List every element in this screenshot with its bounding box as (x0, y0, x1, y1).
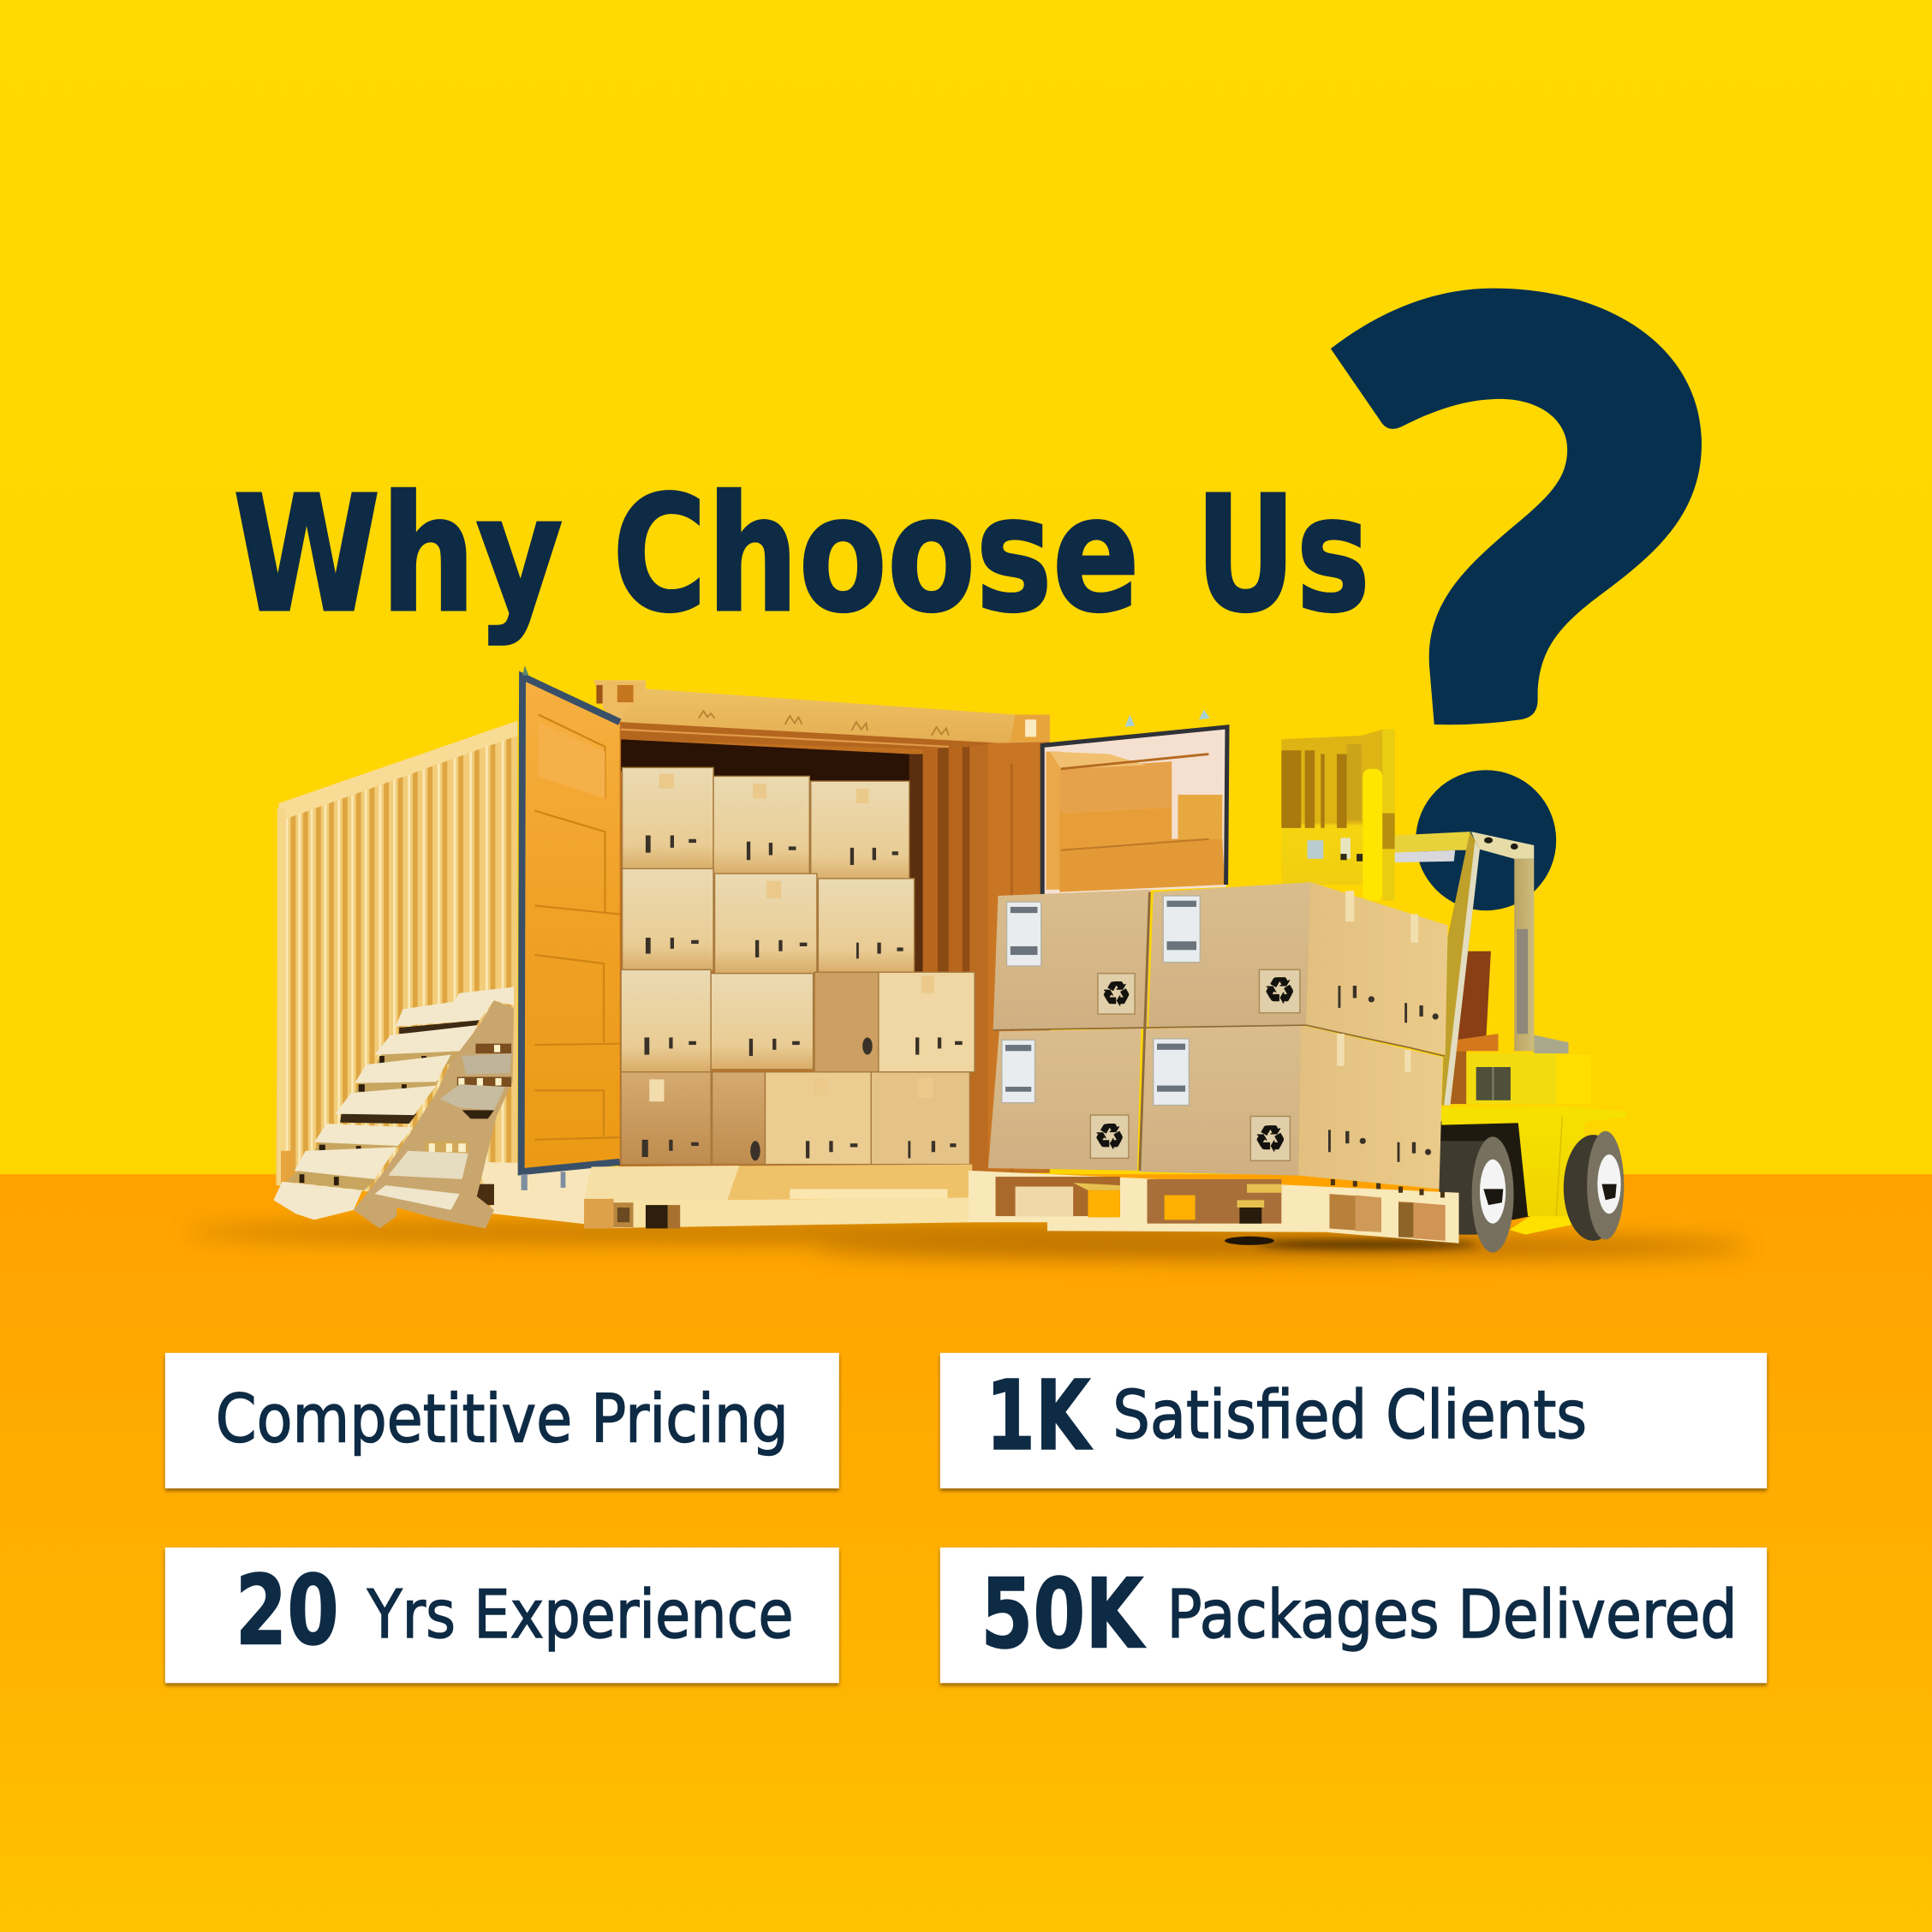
second pallet openings (425, 1044, 511, 1154)
row 4 cartons (621, 1072, 969, 1165)
row 1 cartons (623, 767, 909, 881)
carton tape (649, 774, 934, 1101)
background: yellow wall (0, 0, 1932, 1174)
title: Us (1196, 462, 1370, 648)
card: 50K Packages Delivered: Packages Delivered (1167, 1577, 1738, 1654)
icon: large question mark (1331, 289, 1702, 910)
icon: recycling badges: ♻ (1101, 975, 1131, 1014)
second pallet slats (374, 1053, 511, 1210)
ground shadow (185, 1221, 1750, 1258)
carton seams (993, 892, 1444, 1171)
left door (522, 665, 620, 1190)
collapsed pallet leaning on container (273, 987, 514, 1228)
pallet under cartons (969, 1171, 1459, 1245)
card: 1K Satisfied Clients: Satisfied Clients (1112, 1377, 1587, 1454)
card: 20 Yrs Experience: Yrs Experience (367, 1577, 794, 1654)
interior right wall ribs (909, 739, 1042, 1171)
row 2 cartons (623, 868, 915, 974)
forklift overhead guard (1395, 832, 1534, 1106)
shipping labels (1002, 896, 1200, 1106)
door frame (522, 677, 620, 1172)
cartons stacked in container (621, 767, 975, 1165)
interior ceiling shadow (621, 739, 909, 789)
cartons on pallet carried by forklift (969, 882, 1459, 1245)
card: 50K Packages Delivered (940, 1547, 1767, 1683)
card: 20 Yrs Experience (165, 1547, 839, 1683)
wooden pallet under container cargo (584, 1165, 972, 1228)
container interior (618, 721, 1050, 1173)
background: orange floor (0, 1174, 1932, 1932)
card: Competitive Pricing: Competitive Pricing (216, 1380, 789, 1458)
dark slat ticks (300, 1056, 426, 1185)
container top header beam (593, 680, 1050, 743)
side tape strips (1337, 891, 1418, 1072)
icon: recycling badges (1090, 969, 1300, 1160)
bottom cartons (988, 1025, 1443, 1189)
carton handling marks (642, 835, 963, 1160)
pallet gaps backing (286, 1020, 480, 1190)
top cartons (993, 882, 1448, 1055)
side handling marks (1328, 986, 1439, 1162)
card: Competitive Pricing (165, 1353, 839, 1488)
title: Why (233, 462, 564, 648)
icon: recycling badges: ♻ (1255, 1118, 1286, 1160)
title: Choose (612, 462, 1140, 648)
right door (1042, 710, 1227, 895)
forklift rear mast (1281, 730, 1395, 901)
card: 50K Packages Delivered: 50K (981, 1559, 1146, 1671)
door panel lines (534, 714, 620, 1140)
icon: recycling badges: ♻ (1263, 969, 1296, 1011)
label barcodes (1005, 901, 1196, 1092)
card: 1K Satisfied Clients: 1K (986, 1361, 1093, 1472)
forklift (1281, 730, 1626, 1253)
pallet slats (273, 987, 514, 1219)
card: 20 Yrs Experience: 20 (236, 1555, 339, 1667)
shipping container (273, 665, 1227, 1228)
row 3 cartons (621, 969, 975, 1072)
card: 1K Satisfied Clients (940, 1353, 1767, 1488)
forklift wheel arch (1439, 1118, 1530, 1219)
icon: recycling badges: ♻ (1094, 1118, 1125, 1157)
forklift body (1441, 951, 1626, 1235)
title (233, 462, 1370, 648)
forklift rear wheel (1564, 1131, 1624, 1241)
forklift front wheel (1439, 1136, 1514, 1253)
container corrugated side wall (276, 714, 592, 1225)
pallet tan stringer (354, 1000, 514, 1228)
